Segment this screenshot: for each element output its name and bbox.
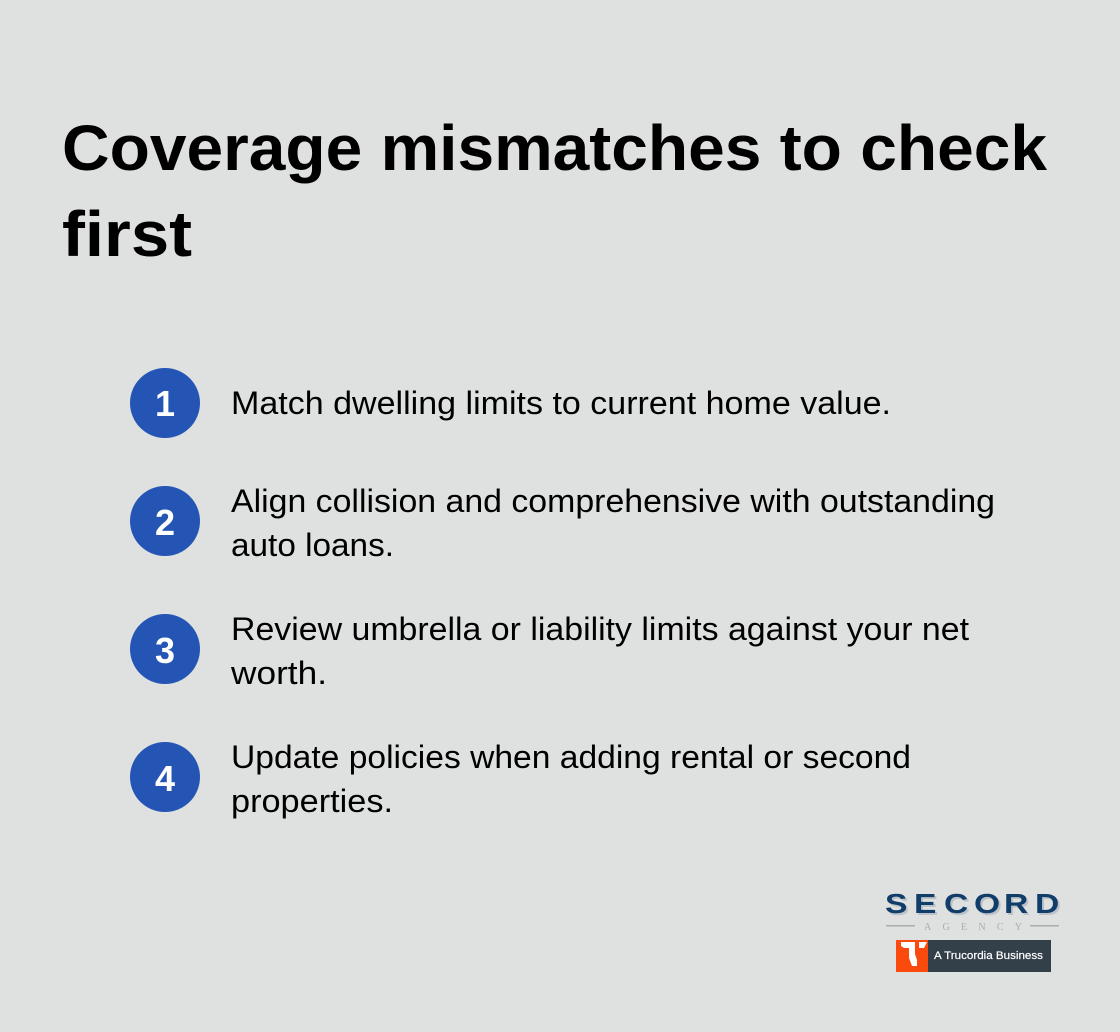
logo: Secord Agency (885, 888, 1061, 933)
item 3 text: worth. (230, 655, 327, 691)
item 4 text (231, 739, 911, 819)
agency text: AGENCY (924, 922, 1022, 933)
number badge 4 (130, 742, 200, 812)
number badge 2 (130, 486, 200, 556)
item 2 text: auto loans. (231, 527, 394, 563)
number badge 2: 2 (155, 502, 175, 543)
title (62, 112, 1047, 270)
number badge 1 (130, 368, 200, 438)
badge text: A Trucordia Business (934, 950, 1044, 962)
item 3 text (230, 611, 969, 691)
number badge 4: 4 (155, 758, 175, 799)
number badge 3: 3 (155, 630, 175, 671)
title: Coverage mismatches to check (62, 112, 1047, 184)
number badge 3 (130, 614, 200, 684)
item 4 text: properties. (231, 783, 393, 819)
T icon (901, 942, 927, 966)
list item 1 (130, 368, 891, 438)
wordmark shadow: SECORD (887, 890, 1061, 921)
item 3 text: Review umbrella or liability limits against your net (231, 611, 969, 647)
item 4 text: Update policies when adding rental or second (231, 739, 911, 775)
list item 2 (130, 483, 995, 563)
number badge 1: 1 (155, 383, 175, 424)
title: first (62, 198, 192, 270)
list item 3 (130, 611, 969, 691)
item 2 text: Align collision and comprehensive with outstanding (231, 483, 995, 519)
item 2 text (231, 483, 995, 563)
wordmark: SECORD (885, 888, 1059, 919)
logo: A Trucordia Business badge (896, 940, 1051, 972)
list item 4 (130, 739, 911, 819)
item 1 text: Match dwelling limits to current home value. (231, 385, 891, 421)
